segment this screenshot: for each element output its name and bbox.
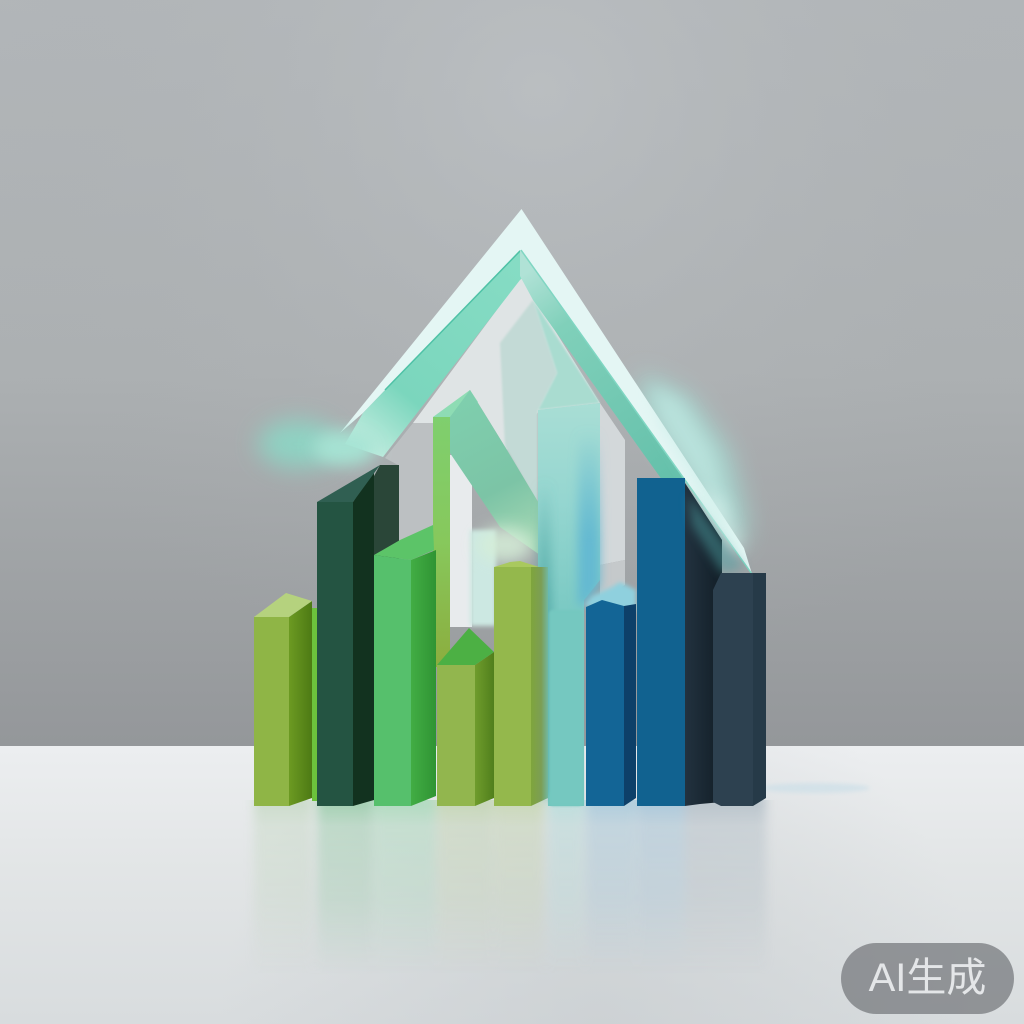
- pale back panel: [413, 276, 600, 450]
- bar: blue tall: [637, 478, 685, 806]
- bar: dark slate middle: [685, 483, 745, 806]
- roof left mint band: [345, 250, 533, 457]
- roof right mint band: [520, 250, 690, 520]
- right glow lower: [690, 490, 742, 555]
- bar: medium green: [374, 525, 436, 806]
- right floor blue glow: [760, 783, 870, 793]
- left glow: [258, 420, 338, 468]
- cyan bar dark streak: [538, 480, 551, 796]
- badge: AI generated: [841, 943, 1014, 1014]
- bar: light green far left: [254, 593, 312, 806]
- blue wedge above short blue bar: [584, 582, 636, 612]
- cyan bar column: [549, 610, 583, 806]
- left glow bridge: [313, 430, 377, 466]
- glow near olive bar top: [477, 527, 533, 563]
- cyan bar blue streak: [578, 430, 600, 605]
- bar: olive centre tall: [494, 561, 548, 806]
- right glow core: [650, 385, 728, 525]
- gray lower-left panel: [385, 423, 433, 545]
- teal tinted panel: [500, 300, 557, 505]
- roof light outer band: [340, 209, 752, 574]
- background wall: [0, 0, 1024, 746]
- bar: green sliver: [312, 608, 318, 801]
- floor reflections: [250, 800, 770, 948]
- badge: AI generated: AI生成: [869, 956, 986, 1000]
- right pale panel: [600, 403, 625, 565]
- bar: dark slate right: [713, 573, 766, 806]
- bar: cyan translucent: [538, 403, 600, 806]
- ribbon: vertical green strip: [433, 417, 450, 667]
- roof left crease line: [385, 251, 520, 390]
- bar: olive centre short: [437, 628, 494, 806]
- teal fade on dark slate: [688, 495, 745, 574]
- roof glow behind right: [640, 372, 748, 552]
- under-panel gray: [600, 560, 625, 600]
- bar: blue short: [586, 600, 636, 806]
- roof glow overlays: [258, 385, 742, 555]
- white vertical strip: [450, 455, 472, 627]
- floor: [0, 746, 1024, 1024]
- pale mint glow strip: [470, 530, 496, 626]
- ribbon: strip top face: [433, 390, 478, 417]
- interior panels: [385, 276, 625, 627]
- mint upper panel: [533, 300, 600, 410]
- house roof frame: [340, 209, 752, 574]
- bar: dark green tall: [317, 465, 399, 806]
- roof right edge line: [521, 250, 752, 574]
- ribbon: diagonal band: [450, 390, 540, 555]
